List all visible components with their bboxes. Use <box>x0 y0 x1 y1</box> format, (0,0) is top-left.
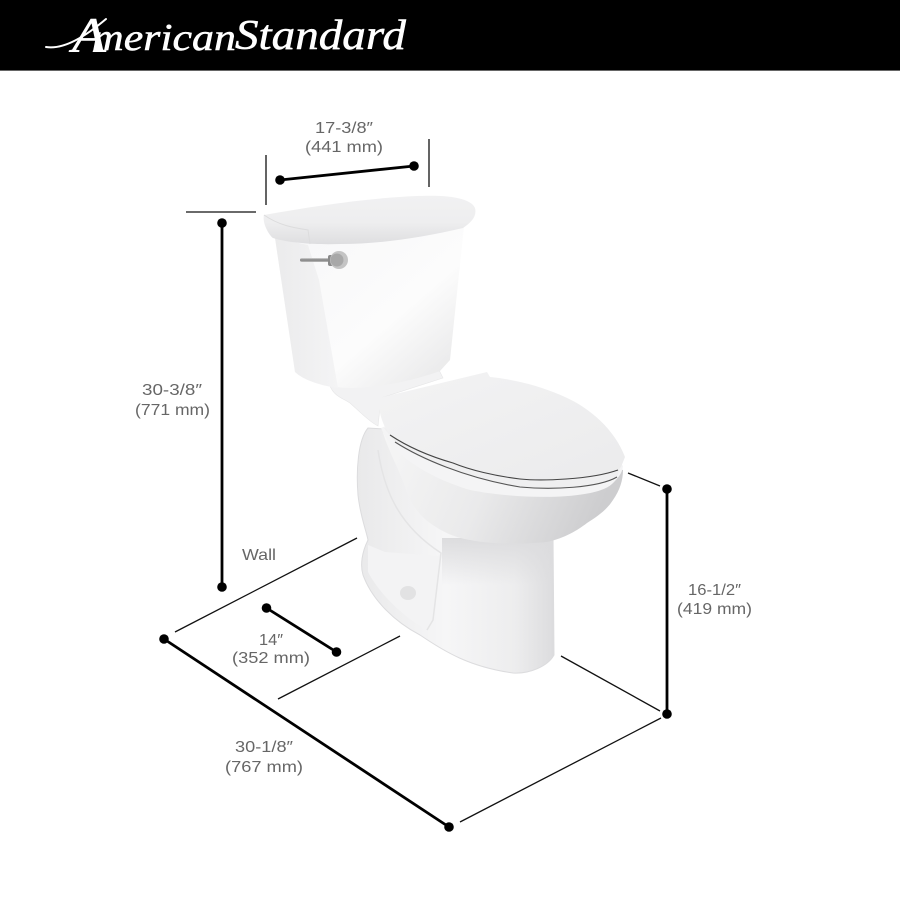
bowl <box>383 433 623 544</box>
tank body <box>275 226 464 388</box>
wall line <box>175 538 357 632</box>
label: 419 mm: (419 mm) <box>677 601 752 618</box>
brand logo: merican <box>92 17 236 59</box>
floor bolt cap <box>400 586 416 600</box>
label: 30-3/8: 30-3/8″ <box>142 382 202 399</box>
label: 352 mm: (352 mm) <box>232 650 310 667</box>
wall label: Wall <box>242 547 276 564</box>
dimension: bowl height 16-1/2 <box>561 473 752 719</box>
brand logo: Standard <box>235 13 407 59</box>
label: 16-1/2: 16-1/2″ <box>688 582 741 599</box>
label: 767 mm: (767 mm) <box>225 759 303 776</box>
label: 14: 14″ <box>259 632 283 649</box>
dimension: height 30-3/8 <box>135 212 256 592</box>
dimension: rough-in 14 <box>232 603 400 699</box>
dimension: tank width 17-3/8 <box>266 120 429 205</box>
rear trapway recess <box>368 545 442 630</box>
seat lid <box>379 372 625 480</box>
label: 17-3/8: 17-3/8″ <box>315 120 373 137</box>
shadow beneath bowl <box>442 538 553 585</box>
tank lid <box>264 196 475 244</box>
label: 771 mm: (771 mm) <box>135 402 210 419</box>
header band <box>0 0 900 71</box>
lower gap line <box>395 442 617 488</box>
bowl rim <box>381 420 623 497</box>
upper gap line <box>390 435 618 480</box>
neck <box>330 366 443 426</box>
flush handle <box>300 251 348 269</box>
brand logo: A <box>69 7 107 63</box>
tank side facet <box>275 238 338 388</box>
label: 441 mm: (441 mm) <box>305 139 383 156</box>
toilet illustration <box>264 196 625 673</box>
brand logo <box>46 7 407 63</box>
label: 30-1/8: 30-1/8″ <box>235 739 293 756</box>
dimension: depth 30-1/8 <box>159 634 661 832</box>
seat ring <box>384 420 622 488</box>
toilet pedestal base <box>357 428 554 673</box>
